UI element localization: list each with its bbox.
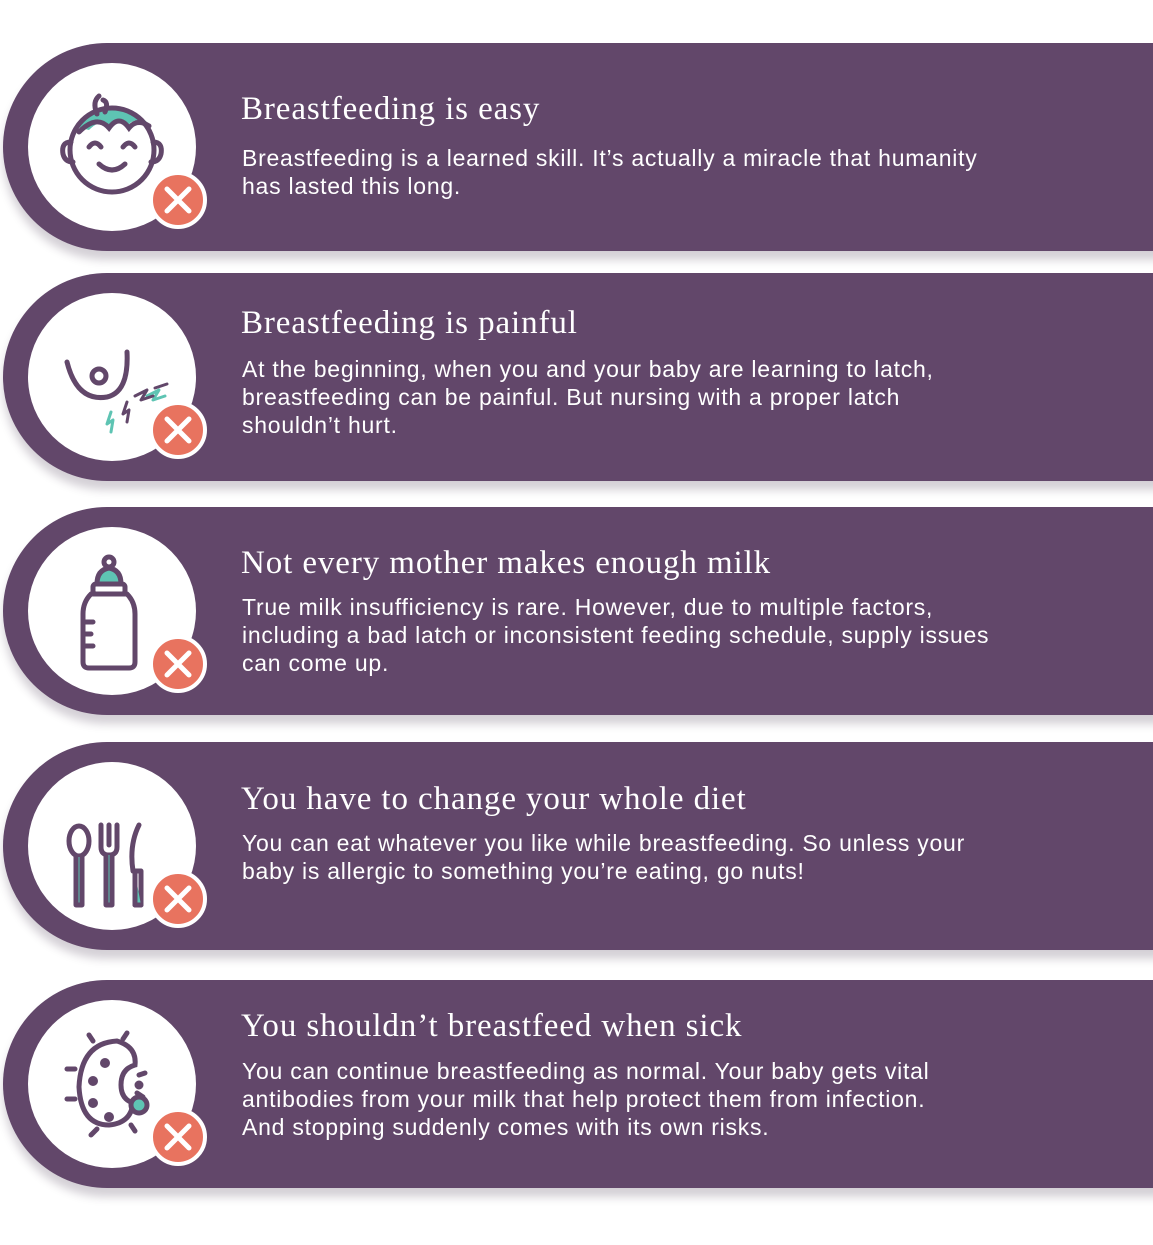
icon: baby: [28, 63, 196, 231]
icon: breast pain: [28, 293, 196, 461]
icon: red x: [153, 174, 207, 229]
title: You have to change your whole diet: [241, 781, 747, 817]
body text: [242, 594, 989, 676]
icon: bacteria: [28, 1000, 196, 1168]
title: Breastfeeding is easy: [241, 91, 540, 127]
body text: You can eat whatever you like while breastfeeding. So unless your: [242, 830, 965, 856]
panel: diet: [3, 742, 1153, 950]
body text: breastfeeding can be painful. But nursing with a proper latch: [242, 384, 900, 410]
panel: sick: [3, 980, 1153, 1188]
title: You shouldn’t breastfeed when sick: [241, 1008, 742, 1044]
title: Breastfeeding is painful: [241, 305, 578, 341]
body text: [242, 1058, 930, 1140]
panel: painful: [3, 273, 1153, 481]
body text: shouldn’t hurt.: [242, 412, 398, 438]
body text: including a bad latch or inconsistent feeding schedule, supply issues: [242, 622, 989, 648]
body text: can come up.: [242, 650, 389, 676]
icon: red x: [153, 404, 207, 459]
body text: [242, 145, 978, 199]
body text: Breastfeeding is a learned skill. It’s actually a miracle that humanity: [242, 145, 978, 171]
body text: [242, 830, 965, 884]
icon: red x: [153, 1111, 207, 1166]
icon: red x: [153, 638, 207, 693]
body text: And stopping suddenly comes with its own risks.: [242, 1114, 769, 1140]
panel: milk: [3, 507, 1153, 715]
icon: red x: [153, 873, 207, 928]
body text: has lasted this long.: [242, 173, 461, 199]
icon: cutlery: [28, 762, 196, 930]
body text: [242, 356, 934, 438]
body text: At the beginning, when you and your baby are learning to latch,: [242, 356, 934, 382]
body text: True milk insufficiency is rare. However, due to multiple factors,: [242, 594, 933, 620]
icon: bottle: [28, 527, 196, 695]
body text: antibodies from your milk that help protect them from infection.: [242, 1086, 925, 1112]
body text: baby is allergic to something you’re eating, go nuts!: [242, 858, 805, 884]
title: Not every mother makes enough milk: [241, 545, 771, 581]
panel: easy: [3, 43, 1153, 251]
body text: You can continue breastfeeding as normal. Your baby gets vital: [242, 1058, 930, 1084]
